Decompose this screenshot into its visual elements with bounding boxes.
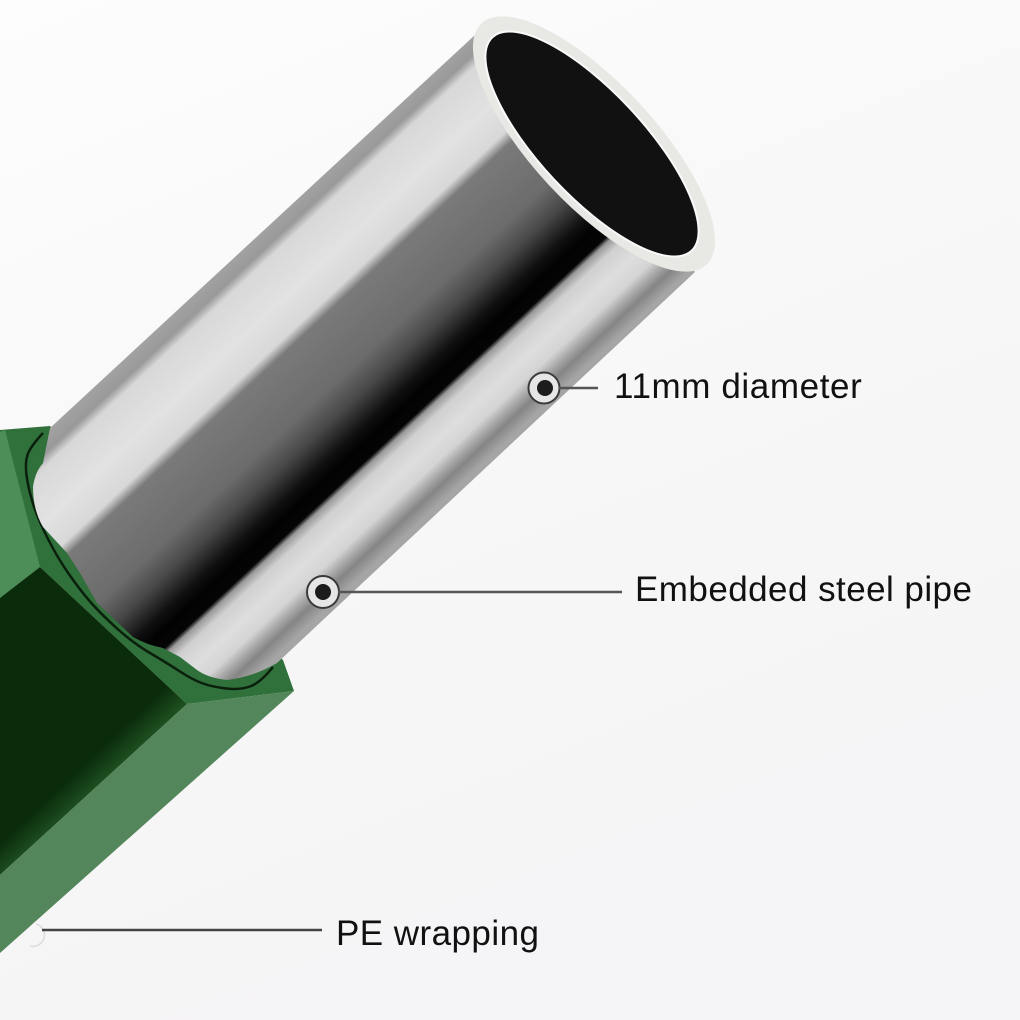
collar face [0, 426, 294, 704]
steel pipe body [33, 35, 695, 680]
callout: PE wrapping [30, 914, 539, 953]
left light face [0, 430, 40, 598]
callout: embedded steel pipe: Embedded steel pipe [635, 570, 972, 609]
callout: embedded steel pipe [307, 570, 972, 609]
black interior [454, 2, 730, 286]
dark face [0, 567, 187, 875]
lower light face [0, 691, 294, 953]
pipe rim [437, 0, 751, 306]
callout: 11mm diameter: 11mm diameter [614, 367, 862, 406]
pipe end opening [437, 0, 751, 306]
callout: PE wrapping: PE wrapping [336, 914, 539, 953]
black gap line around pipe [26, 433, 273, 689]
PE wrapping: green square tube [0, 426, 294, 953]
